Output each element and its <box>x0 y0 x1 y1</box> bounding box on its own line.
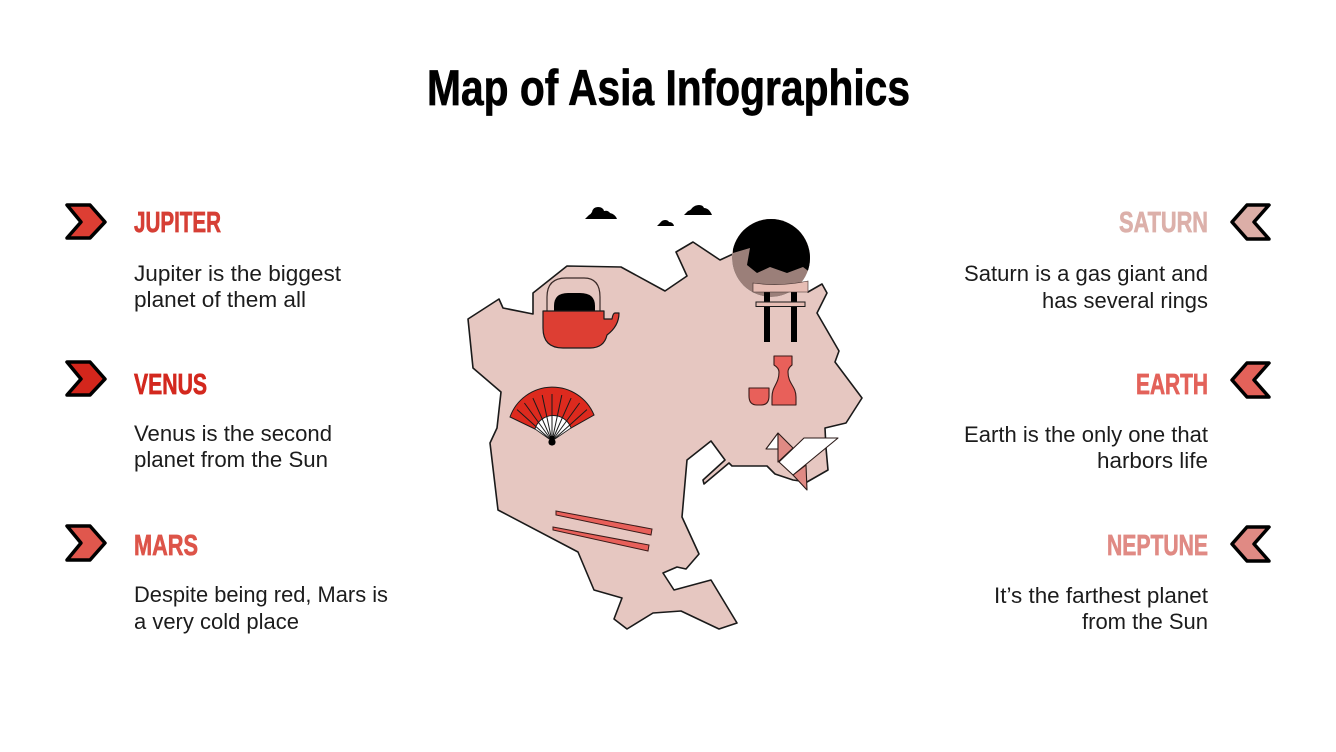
text: Venus description <box>134 421 332 472</box>
icon: origami crane <box>766 433 838 490</box>
text: Jupiter description <box>134 261 341 312</box>
icon: Neptune chevron <box>1232 527 1269 561</box>
text: Jupiter description: planet of them all <box>134 287 306 312</box>
heading: Neptune: NEPTUNE <box>1107 530 1208 562</box>
panel: Earth <box>964 363 1269 473</box>
heading: Mars: MARS <box>134 530 198 562</box>
icon: sun <box>732 219 810 297</box>
text: Mars description <box>134 582 388 634</box>
icon: Jupiter chevron <box>67 205 105 238</box>
heading: Saturn: SATURN <box>1119 207 1208 239</box>
icon: teapot <box>543 278 619 348</box>
icon: Earth chevron <box>1232 363 1269 397</box>
panel: Neptune <box>994 527 1269 634</box>
panel: Saturn <box>964 205 1269 313</box>
heading: Earth: EARTH <box>1136 369 1208 401</box>
text: Saturn description <box>964 261 1208 313</box>
title: Map of Asia Infographics <box>427 60 910 116</box>
heading: Venus: VENUS <box>134 369 207 401</box>
text: Earth description: harbors life <box>1097 448 1208 473</box>
icon: Venus chevron <box>67 362 105 395</box>
icon: Mars chevron <box>67 526 105 560</box>
text: Venus description: Venus is the second <box>134 421 332 446</box>
text: Saturn description: Saturn is a gas giant and <box>964 261 1208 286</box>
heading: Jupiter: JUPITER <box>134 207 221 239</box>
text: Mars description: Despite being red, Mars is <box>134 582 388 607</box>
icon: torii gate <box>753 281 808 342</box>
icon: sake set <box>749 356 796 405</box>
text: Mars description: a very cold place <box>134 609 299 634</box>
map landmass <box>468 242 862 629</box>
panel: Venus <box>67 362 332 472</box>
text: Neptune description <box>994 583 1208 634</box>
icon: Saturn chevron <box>1232 205 1269 239</box>
text: Earth description <box>964 422 1208 473</box>
icon: clouds <box>585 205 712 226</box>
text: Saturn description: has several rings <box>1042 288 1208 313</box>
text: Neptune description: from the Sun <box>1082 609 1208 634</box>
text: Earth description: Earth is the only one that <box>964 422 1208 447</box>
icon: folding fan <box>510 387 594 446</box>
panel: Jupiter <box>67 205 341 312</box>
map illustration <box>468 205 862 629</box>
icon: chopsticks <box>553 511 652 551</box>
text: Venus description: planet from the Sun <box>134 447 328 472</box>
panel: Mars <box>67 526 388 634</box>
text: Neptune description: It’s the farthest planet <box>994 583 1208 608</box>
text: Jupiter description: Jupiter is the biggest <box>134 261 341 286</box>
